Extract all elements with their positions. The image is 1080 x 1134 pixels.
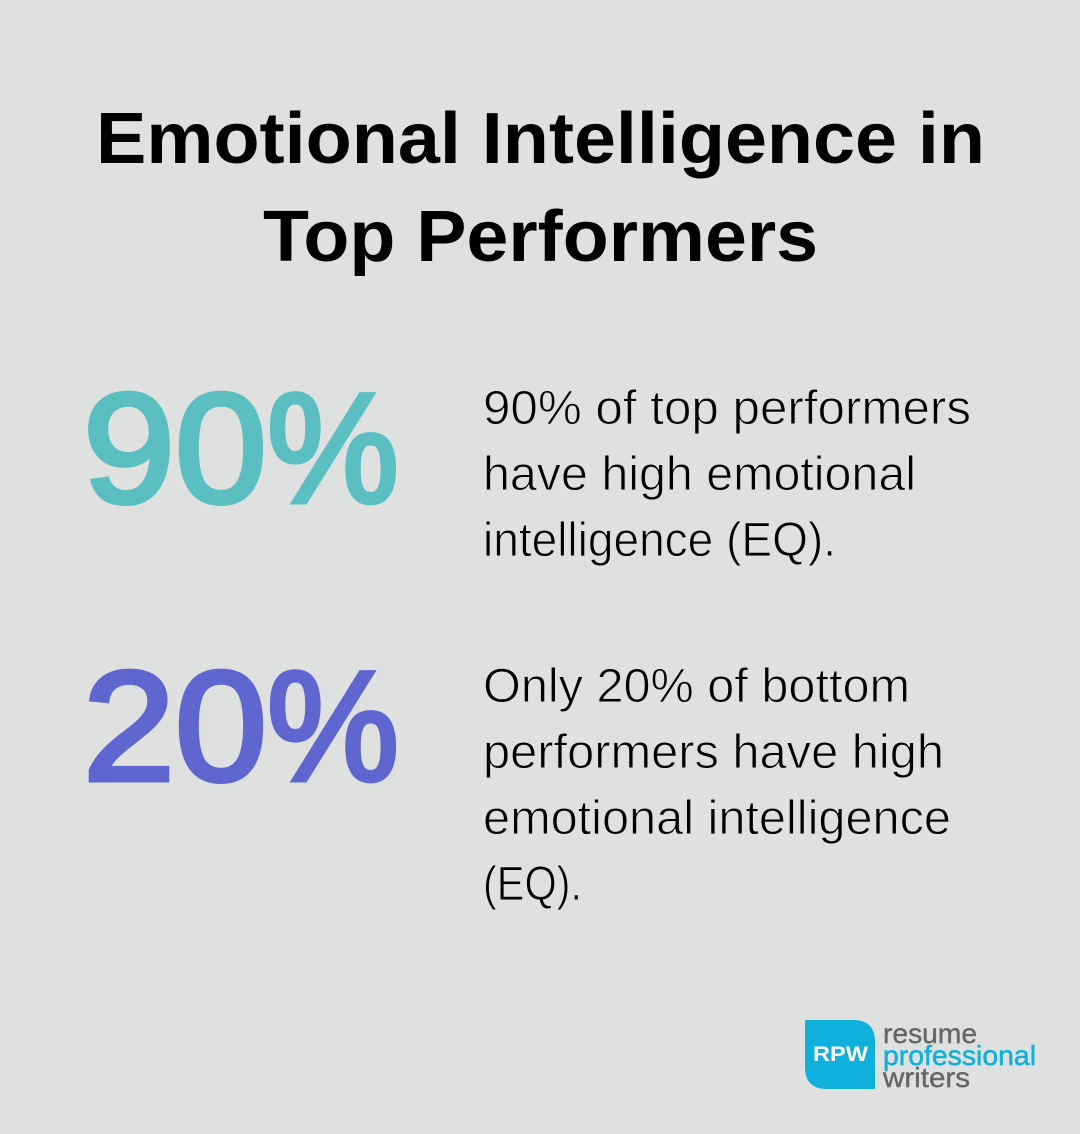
text: bottom performers [483, 660, 951, 911]
text: bottom performers: Only 20% of bottom [483, 660, 910, 713]
stat: 90%: % [267, 362, 399, 536]
stat: 20% [83, 640, 399, 814]
text: bottom performers: emotional intelligence [483, 792, 951, 845]
stat: 90%: 90 [83, 362, 267, 536]
logo wordmark [882, 1018, 1036, 1093]
stat: 20%: % [267, 640, 399, 814]
logo: RPW resume professional writers [805, 1018, 1036, 1093]
logo wordmark: writers [882, 1062, 970, 1093]
logo badge initials: RPW [813, 1043, 868, 1066]
text: bottom performers: (EQ). [483, 858, 582, 911]
logo wordmark: resume [883, 1018, 977, 1049]
title: Top Performers [263, 197, 818, 277]
logo badge [805, 1020, 875, 1089]
text: bottom performers: performers have high [483, 726, 944, 779]
text: top performers [483, 382, 971, 567]
title [96, 99, 985, 277]
title: Emotional Intelligence in [96, 99, 985, 179]
stat: 20%: 20 [83, 640, 267, 814]
logo wordmark: professional [883, 1040, 1036, 1071]
stat: 90% [83, 362, 399, 536]
text: top performers: 90% of top performers [483, 382, 971, 435]
text: top performers: have high emotional [483, 448, 916, 501]
text: top performers: intelligence (EQ). [483, 514, 836, 567]
